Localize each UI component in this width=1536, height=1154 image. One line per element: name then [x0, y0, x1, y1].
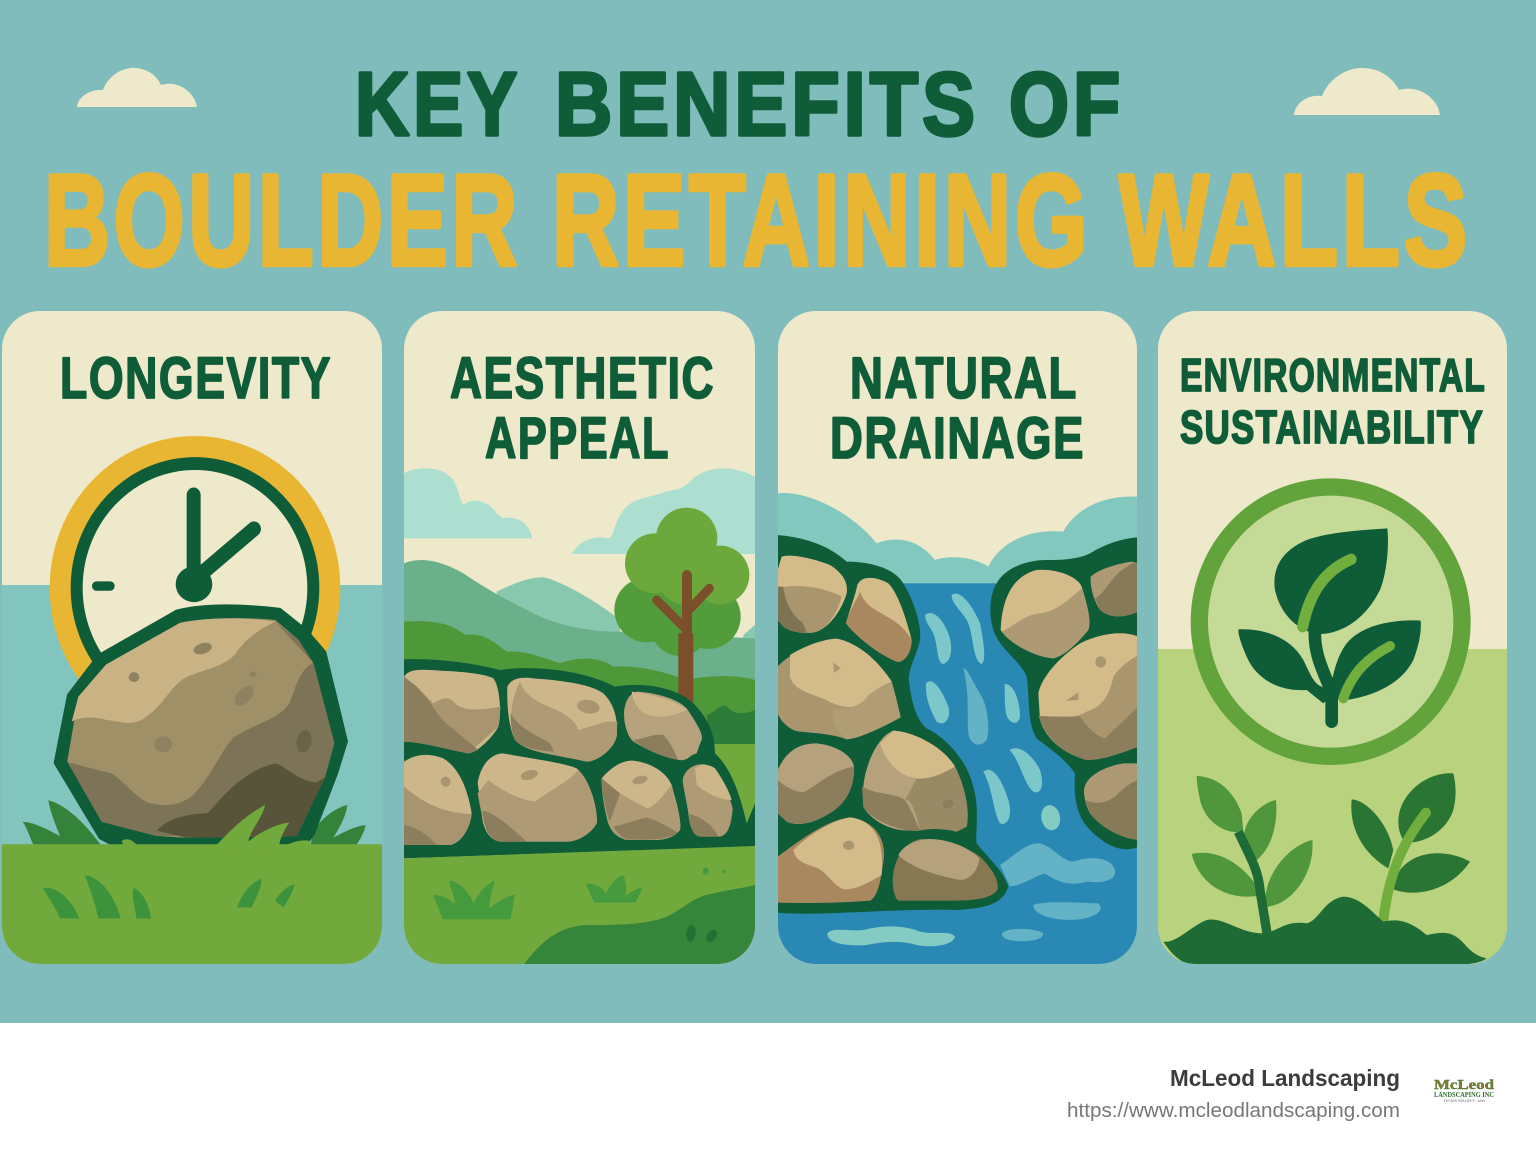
right grass patch — [714, 744, 755, 824]
seedling: right — [1351, 773, 1470, 920]
panel: aesthetic appeal — [404, 311, 757, 965]
card background — [1158, 311, 1507, 969]
title — [44, 55, 1471, 293]
boulder — [55, 606, 347, 852]
logo: TEWKSBURY, MA — [1443, 1098, 1485, 1103]
soil — [1163, 897, 1487, 965]
company name: McLeod Landscaping — [1170, 1065, 1400, 1091]
foreground grass — [404, 846, 755, 965]
mountains — [404, 560, 755, 747]
back grass — [23, 800, 366, 849]
card background — [404, 311, 757, 965]
boulders: left wall — [777, 535, 1008, 914]
icon: leaf in circle — [1191, 478, 1471, 765]
heading: aesthetic appeal: AESTHETIC — [450, 346, 715, 411]
clouds — [404, 468, 755, 554]
heading: aesthetic appeal: APPEAL — [485, 406, 670, 471]
title line 1: OF — [1009, 55, 1124, 155]
heading: natural drainage — [830, 346, 1085, 471]
panel: environmental sustainability — [1158, 311, 1507, 969]
heading: longevity: LONGEVITY — [60, 346, 332, 411]
title line 1: BENEFITS — [555, 55, 979, 155]
title line 2: RETAINING — [552, 147, 1091, 293]
heading: natural drainage: NATURAL — [850, 346, 1078, 411]
title line 2 — [44, 147, 1471, 293]
title line 1 — [355, 55, 1124, 155]
card background — [777, 311, 1138, 967]
hills — [778, 493, 1137, 587]
panel: natural drainage — [777, 311, 1138, 967]
tree — [614, 508, 749, 705]
heading: aesthetic appeal — [450, 346, 715, 471]
card background — [0, 311, 400, 976]
logo — [1434, 1078, 1494, 1103]
cloud: left — [77, 68, 197, 107]
title line 2: BOULDER — [44, 147, 521, 293]
seedling: left — [1192, 776, 1313, 935]
heading: natural drainage: DRAINAGE — [830, 406, 1085, 471]
water — [777, 583, 1138, 967]
footer — [0, 1023, 1536, 1154]
cloud: right — [1294, 68, 1440, 115]
heading: environmental sustainability — [1180, 349, 1486, 453]
boulder wall — [404, 659, 755, 858]
icon: clock — [50, 436, 340, 679]
ground grass — [2, 805, 382, 964]
title line 1: KEY — [355, 55, 521, 155]
website url: https://www.mcleodlandscaping.com — [1067, 1100, 1400, 1122]
panel: longevity — [0, 311, 400, 976]
water highlights — [827, 594, 1115, 946]
logo: McLeod — [1434, 1078, 1494, 1093]
boulders: right wall — [990, 537, 1138, 849]
logo: LANDSCAPING INC — [1434, 1090, 1494, 1099]
